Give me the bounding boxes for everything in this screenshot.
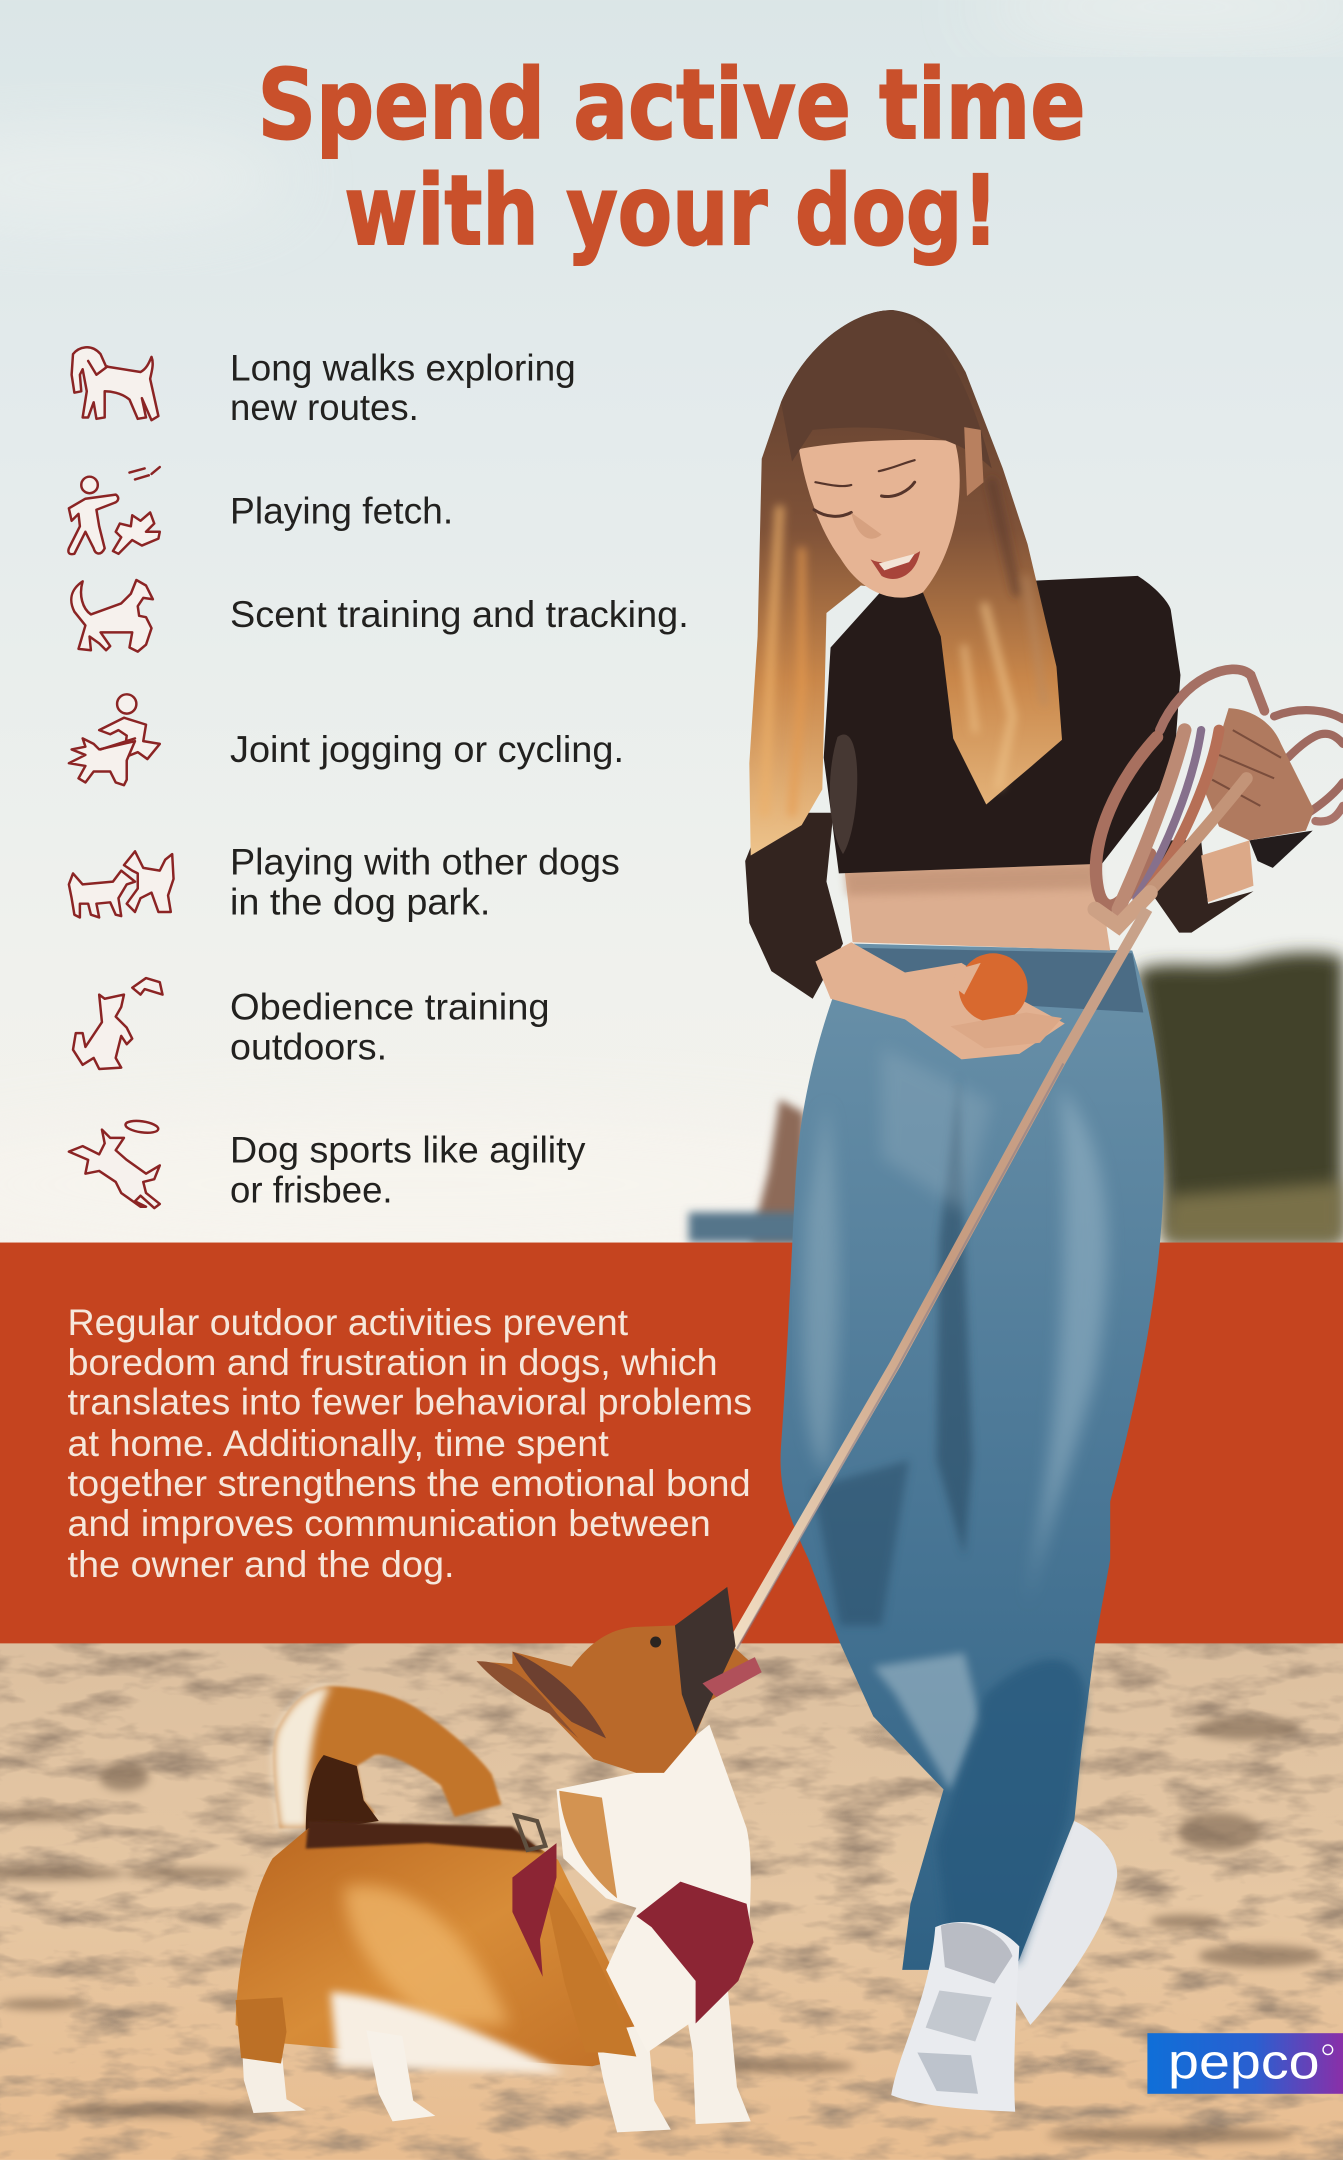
front shoe [891, 1922, 1019, 2112]
background: sky with clouds [0, 0, 1343, 1254]
band: orange panel [0, 1243, 1343, 1643]
text: activity labels: Joint jogging or cycling. [230, 728, 624, 770]
ball [959, 953, 1028, 1022]
photo: corgi dog with harness [236, 1587, 762, 2132]
icon: dog sports frisbee [69, 1119, 160, 1208]
text: outdoor benefits paragraph: translates into fewer behavioral problems [67, 1381, 752, 1423]
face [799, 440, 960, 598]
left sleeve [745, 813, 843, 999]
icon: playing fetch [68, 467, 160, 554]
hair front top [781, 310, 992, 468]
text: activity labels: in the dog park. [230, 881, 490, 923]
black top [824, 576, 1180, 873]
right sleeve and forearm [1150, 840, 1253, 933]
body [236, 1828, 647, 2066]
icon: dogs playing in park [69, 851, 174, 917]
text: activity labels: outdoors. [230, 1025, 387, 1067]
back shoe [1006, 1821, 1117, 2025]
icon: jogging with dog [69, 694, 160, 785]
icon: scent training dog [71, 580, 153, 652]
title [258, 49, 1085, 267]
text: outdoor benefits paragraph: together strengthens the emotional bond [67, 1462, 751, 1504]
text: outdoor benefits paragraph: boredom and frustration in dogs, which [67, 1341, 718, 1383]
background: sandy beach [0, 1639, 1343, 2160]
hair highlights [764, 482, 1044, 813]
bare midriff [844, 861, 1110, 951]
text: activity labels: Playing with other dogs [230, 841, 620, 883]
front legs [594, 2025, 671, 2132]
text: activity labels: Dog sports like agility [230, 1129, 586, 1171]
leash coils [1095, 669, 1264, 926]
watch [1249, 831, 1313, 868]
leash line [730, 909, 1147, 1649]
text: outdoor benefits paragraph [67, 1301, 752, 1585]
hind legs [242, 2052, 306, 2113]
photo: woman with leash and ball [730, 310, 1343, 2112]
chest white [556, 1725, 751, 2052]
jeans [781, 944, 1164, 1970]
background: distant trees and building [689, 953, 1343, 1243]
text: activity labels [230, 346, 689, 1211]
leash strands on the right [1274, 710, 1343, 821]
title: Spend active time [258, 49, 1085, 161]
text: activity labels: or frisbee. [230, 1169, 393, 1211]
text: outdoor benefits paragraph: at home. Additionally, time spent [67, 1422, 609, 1464]
logo: pepco: pepco [1168, 2034, 1320, 2090]
text: outdoor benefits paragraph: the owner and the dog. [67, 1543, 455, 1585]
head [477, 1587, 760, 1773]
left forearm and hand [815, 942, 1065, 1059]
title: with your dog! [344, 155, 999, 267]
text: activity labels: Playing fetch. [230, 490, 453, 532]
text: activity labels: Obedience training [230, 985, 550, 1027]
text: outdoor benefits paragraph: and improves communication between [67, 1502, 711, 1544]
text: activity labels: Scent training and tracking. [230, 593, 689, 635]
tail [273, 1686, 501, 1832]
right hand [1204, 708, 1314, 840]
text: activity labels: Long walks exploring [230, 346, 576, 388]
harness [512, 1843, 753, 2024]
logo: pepco [1147, 2033, 1343, 2094]
text: activity labels: new routes. [230, 386, 419, 428]
icon: long walks dog [72, 347, 158, 420]
panel: activities list [68, 346, 689, 1211]
icon: obedience training [73, 978, 163, 1069]
text: outdoor benefits paragraph: Regular outdoor activities prevent [67, 1301, 629, 1343]
hair back [749, 310, 1062, 855]
